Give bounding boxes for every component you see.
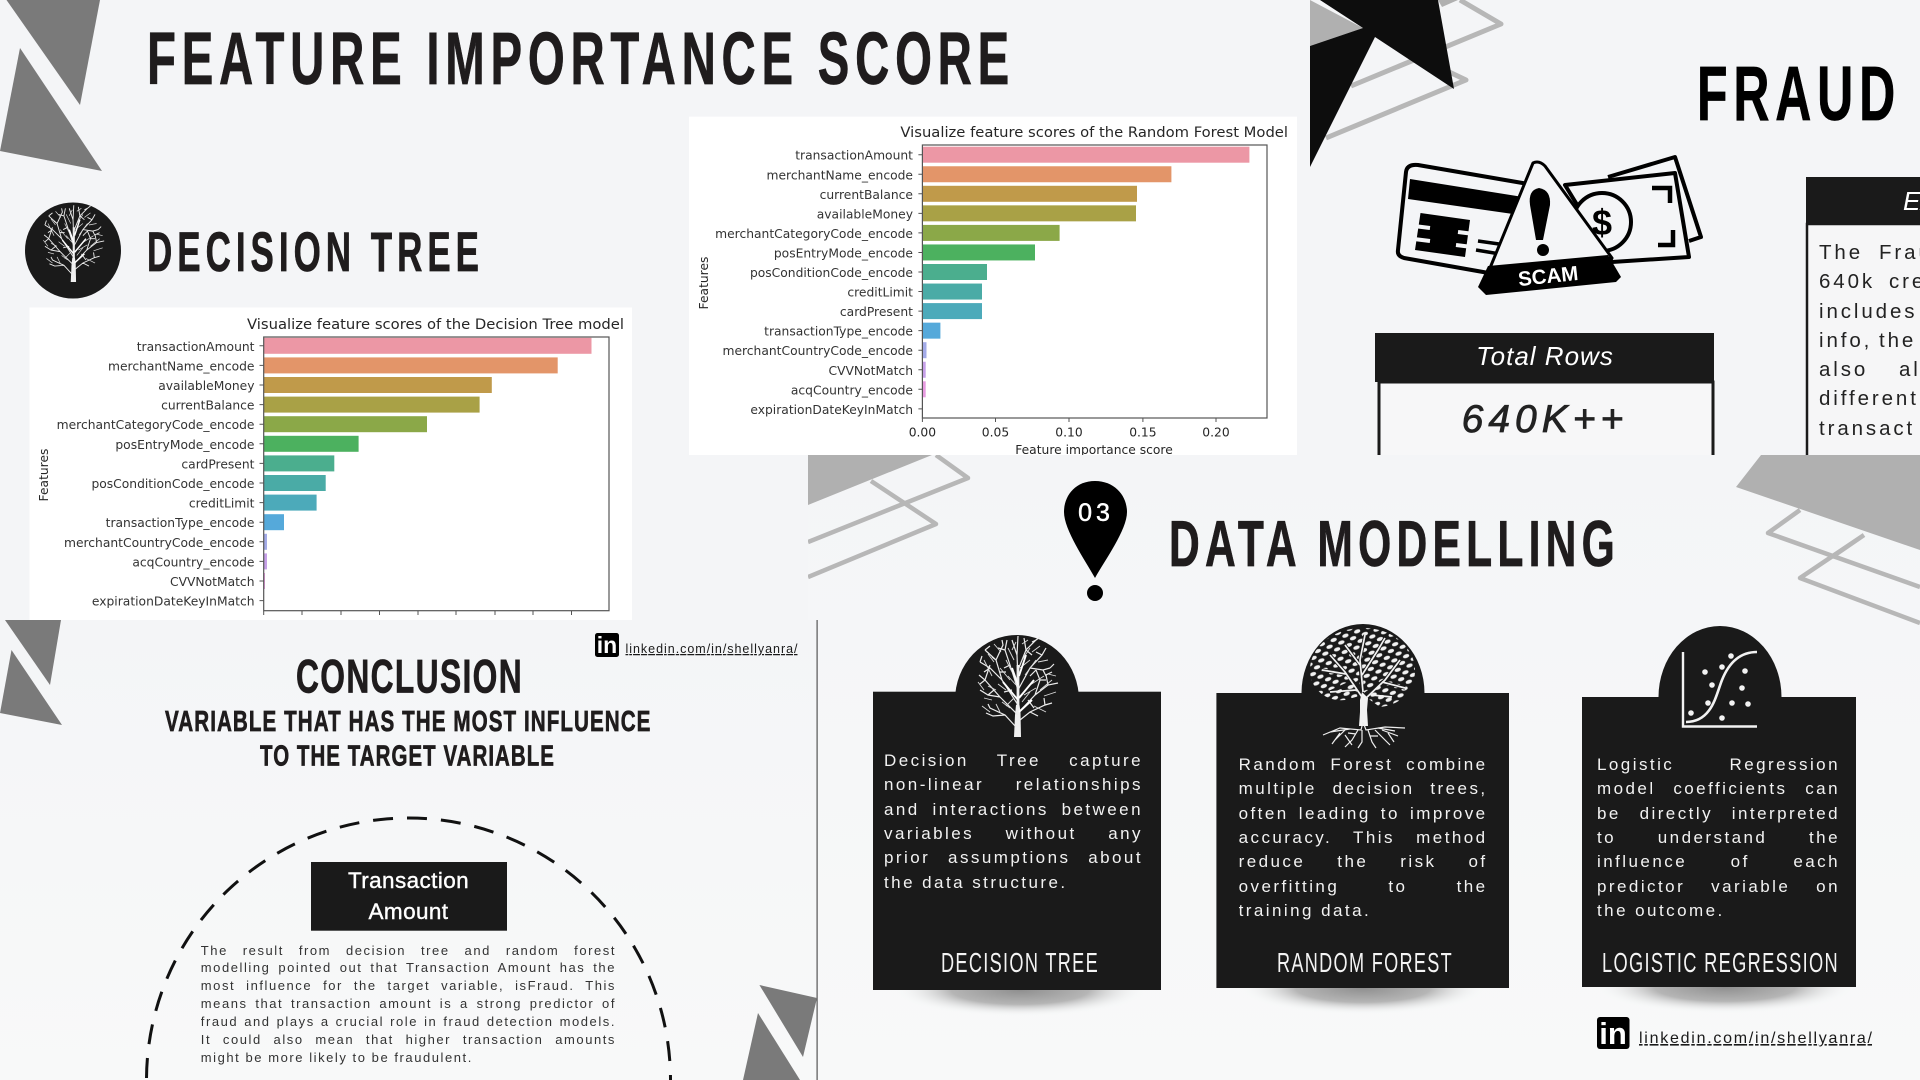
description: overfitting to the xyxy=(1239,877,1488,896)
description: model coefficients can xyxy=(1597,779,1840,798)
chart: decision tree feature scores: merchantCountryCode_encode xyxy=(64,536,254,550)
chart: random forest feature scores: transactionType_encode xyxy=(764,325,913,339)
heading: data modelling: DATA MODELLING xyxy=(1169,507,1620,580)
text card: explanation: includes xyxy=(1819,300,1917,323)
text card: explanation: The xyxy=(1819,241,1863,264)
chart: decision tree feature scores: Features xyxy=(37,449,51,501)
chart: decision tree feature scores xyxy=(30,308,632,620)
chart: decision tree feature scores: expirationDateKeyInMatch xyxy=(92,595,254,609)
chart: decision tree feature scores: transactionAmount xyxy=(137,340,255,354)
chart: random forest feature scores: merchantCategoryCode_encode xyxy=(715,227,913,241)
stat card: total rows: Total Rows xyxy=(1476,341,1614,371)
chart: decision tree feature scores: availableMoney xyxy=(158,379,254,393)
icon: scam warning over card and cash: $ xyxy=(1592,202,1612,243)
decorative outlines and star xyxy=(1310,0,1501,167)
chart: random forest feature scores: 0.05 xyxy=(982,426,1009,440)
label: transaction amount: Transaction xyxy=(348,868,469,893)
heading: decision tree: DECISION TREE xyxy=(147,220,484,283)
chart: random forest feature scores: 0.00 xyxy=(909,426,936,440)
conclusion text: means that transaction amount is a strong predictor of xyxy=(201,996,616,1011)
linkedin link: in xyxy=(597,632,617,658)
chart: decision tree feature scores: merchantCategoryCode_encode xyxy=(57,418,254,432)
chart: random forest feature scores: 0.10 xyxy=(1055,426,1083,440)
text card: explanation: also xyxy=(1819,358,1868,381)
linkedin link: in xyxy=(1599,1016,1627,1051)
card shadows xyxy=(914,987,1833,1012)
chart: random forest feature scores: 0.20 xyxy=(1202,426,1230,440)
linkedin link: linkedin.com/in/shellyanra/ xyxy=(626,642,798,656)
chart: decision tree feature scores: posEntryMode_encode xyxy=(115,438,254,452)
label: RANDOM FOREST xyxy=(1277,947,1453,978)
icon: location pin 03 xyxy=(1064,481,1127,601)
text card: explanation: different xyxy=(1819,387,1919,410)
description: variables without any xyxy=(884,824,1143,843)
linkedin link xyxy=(595,632,798,658)
chart: random forest feature scores: Feature importance score xyxy=(1015,443,1173,457)
description: the data structure. xyxy=(884,873,1068,892)
description: the outcome. xyxy=(1597,901,1725,920)
chart: random forest feature scores: expirationDateKeyInMatch xyxy=(750,403,913,417)
chart: random forest feature scores: acqCountry_encode xyxy=(791,383,913,397)
chart: random forest feature scores: creditLimit xyxy=(847,286,913,300)
description: accuracy. This method xyxy=(1239,828,1488,847)
description: multiple decision trees, xyxy=(1239,779,1488,798)
conclusion text: most influence for the target variable, isFraud. This xyxy=(201,978,616,993)
decorative triangles xyxy=(0,0,102,171)
stat card: total rows: 640K++ xyxy=(1462,398,1628,441)
description: be directly interpreted xyxy=(1597,804,1840,823)
text card: explanation: transact xyxy=(1819,417,1915,440)
label: transaction amount: Amount xyxy=(369,899,449,924)
chart: random forest feature scores: posEntryMode_encode xyxy=(774,246,913,260)
icon: logistic curve plot xyxy=(1683,652,1757,726)
description: reduce the risk of xyxy=(1239,852,1488,871)
chart: decision tree feature scores: merchantName_encode xyxy=(108,359,254,373)
decorative shapes left xyxy=(808,455,968,577)
linkedin link xyxy=(1597,1016,1873,1051)
stat card: total rows xyxy=(1375,333,1714,455)
chart: random forest feature scores: availableMoney xyxy=(817,207,913,221)
dashed arch xyxy=(146,818,670,1080)
description xyxy=(1597,758,1837,916)
card: logistic regression xyxy=(1582,626,1856,987)
chart: random forest feature scores: merchantCountryCode_encode xyxy=(722,344,913,358)
text card: explanation: info, xyxy=(1819,329,1872,352)
subheading xyxy=(164,710,650,766)
heading: conclusion: CONCLUSION xyxy=(296,650,523,702)
text card: explanation xyxy=(1806,177,1920,464)
description: often leading to improve xyxy=(1239,804,1488,823)
icon: leafy tree with roots xyxy=(1310,628,1415,748)
icon: location pin 03: 03 xyxy=(1078,499,1114,527)
chart: decision tree feature scores: transactionType_encode xyxy=(106,516,254,530)
icon: bare tree xyxy=(978,636,1058,737)
description: Logistic Regression xyxy=(1597,755,1840,774)
description xyxy=(1239,753,1488,928)
chart: random forest feature scores: merchantName_encode xyxy=(767,168,913,182)
chart: decision tree feature scores: cardPresent xyxy=(181,457,255,471)
icon: scam warning over card and cash: SCAM xyxy=(1517,262,1579,291)
description: non-linear relationships xyxy=(884,775,1143,794)
decorative triangles bottom right xyxy=(743,985,817,1080)
conclusion text: might be more likely to be fraudulent. xyxy=(201,1050,473,1065)
card: random forest xyxy=(1216,624,1509,988)
panel: fraud detection xyxy=(1310,0,1920,472)
description: Random Forest combine xyxy=(1239,755,1488,774)
chart: random forest feature scores: cardPresent xyxy=(840,305,913,319)
subheading: TO THE TARGET VARIABLE xyxy=(260,740,555,772)
description: to understand the xyxy=(1597,828,1840,847)
title: FEATURE IMPORTANCE SCORE xyxy=(147,17,1015,100)
text card: explanation: the xyxy=(1879,329,1916,352)
description xyxy=(884,754,1140,888)
conclusion text: modelling pointed out that Transaction Amount has the xyxy=(201,960,616,975)
chart: random forest feature scores: posConditionCode_encode xyxy=(750,266,913,280)
chart: random forest feature scores: transactionAmount xyxy=(795,149,913,163)
chart: random forest feature scores xyxy=(689,117,1297,457)
conclusion text xyxy=(201,942,616,1072)
conclusion text: The result from decision tree and random forest xyxy=(201,942,616,958)
decorative triangles top left xyxy=(0,620,62,725)
chart: decision tree feature scores: Visualize feature scores of the Decision Tree model xyxy=(247,317,624,333)
subheading: VARIABLE THAT HAS THE MOST INFLUENCE xyxy=(165,706,652,738)
description: predictor variable on xyxy=(1597,877,1840,896)
chart: decision tree feature scores: creditLimit xyxy=(189,497,255,511)
description: Decision Tree capture xyxy=(884,751,1143,770)
description: training data. xyxy=(1239,901,1371,920)
card: decision tree xyxy=(873,635,1161,990)
chart: decision tree feature scores: CVVNotMatch xyxy=(170,575,254,589)
chart: random forest feature scores: 0.15 xyxy=(1129,426,1157,440)
panel: conclusion xyxy=(0,620,818,1080)
chart: decision tree feature scores: currentBalance xyxy=(161,399,254,413)
chart: decision tree feature scores: acqCountry_encode xyxy=(132,555,254,569)
chart: random forest feature scores: Features xyxy=(697,257,711,309)
description: influence of each xyxy=(1597,852,1840,871)
chart: decision tree feature scores: posConditionCode_encode xyxy=(91,477,254,491)
panel: feature importance score xyxy=(0,0,1310,620)
description: prior assumptions about xyxy=(884,848,1143,867)
chart: random forest feature scores: Visualize feature scores of the Random Forest Model xyxy=(900,125,1288,141)
label: DECISION TREE xyxy=(941,947,1099,978)
text card: explanation: 640k xyxy=(1819,270,1875,293)
conclusion text: fraud and plays a crucial role in fraud detection models. xyxy=(201,1014,616,1029)
decorative shapes right xyxy=(1736,455,1920,623)
chart: random forest feature scores: CVVNotMatch xyxy=(829,364,913,378)
icon: tree badge xyxy=(25,202,121,298)
chart: random forest feature scores: currentBalance xyxy=(820,188,913,202)
label: transaction amount xyxy=(311,862,507,931)
description: and interactions between xyxy=(884,800,1143,819)
conclusion text: It could also mean that higher transaction amounts xyxy=(201,1032,616,1047)
panel: data modelling xyxy=(808,455,1920,1080)
linkedin link: linkedin.com/in/shellyanra/ xyxy=(1639,1030,1873,1047)
icon: scam warning over card and cash xyxy=(1398,157,1701,295)
